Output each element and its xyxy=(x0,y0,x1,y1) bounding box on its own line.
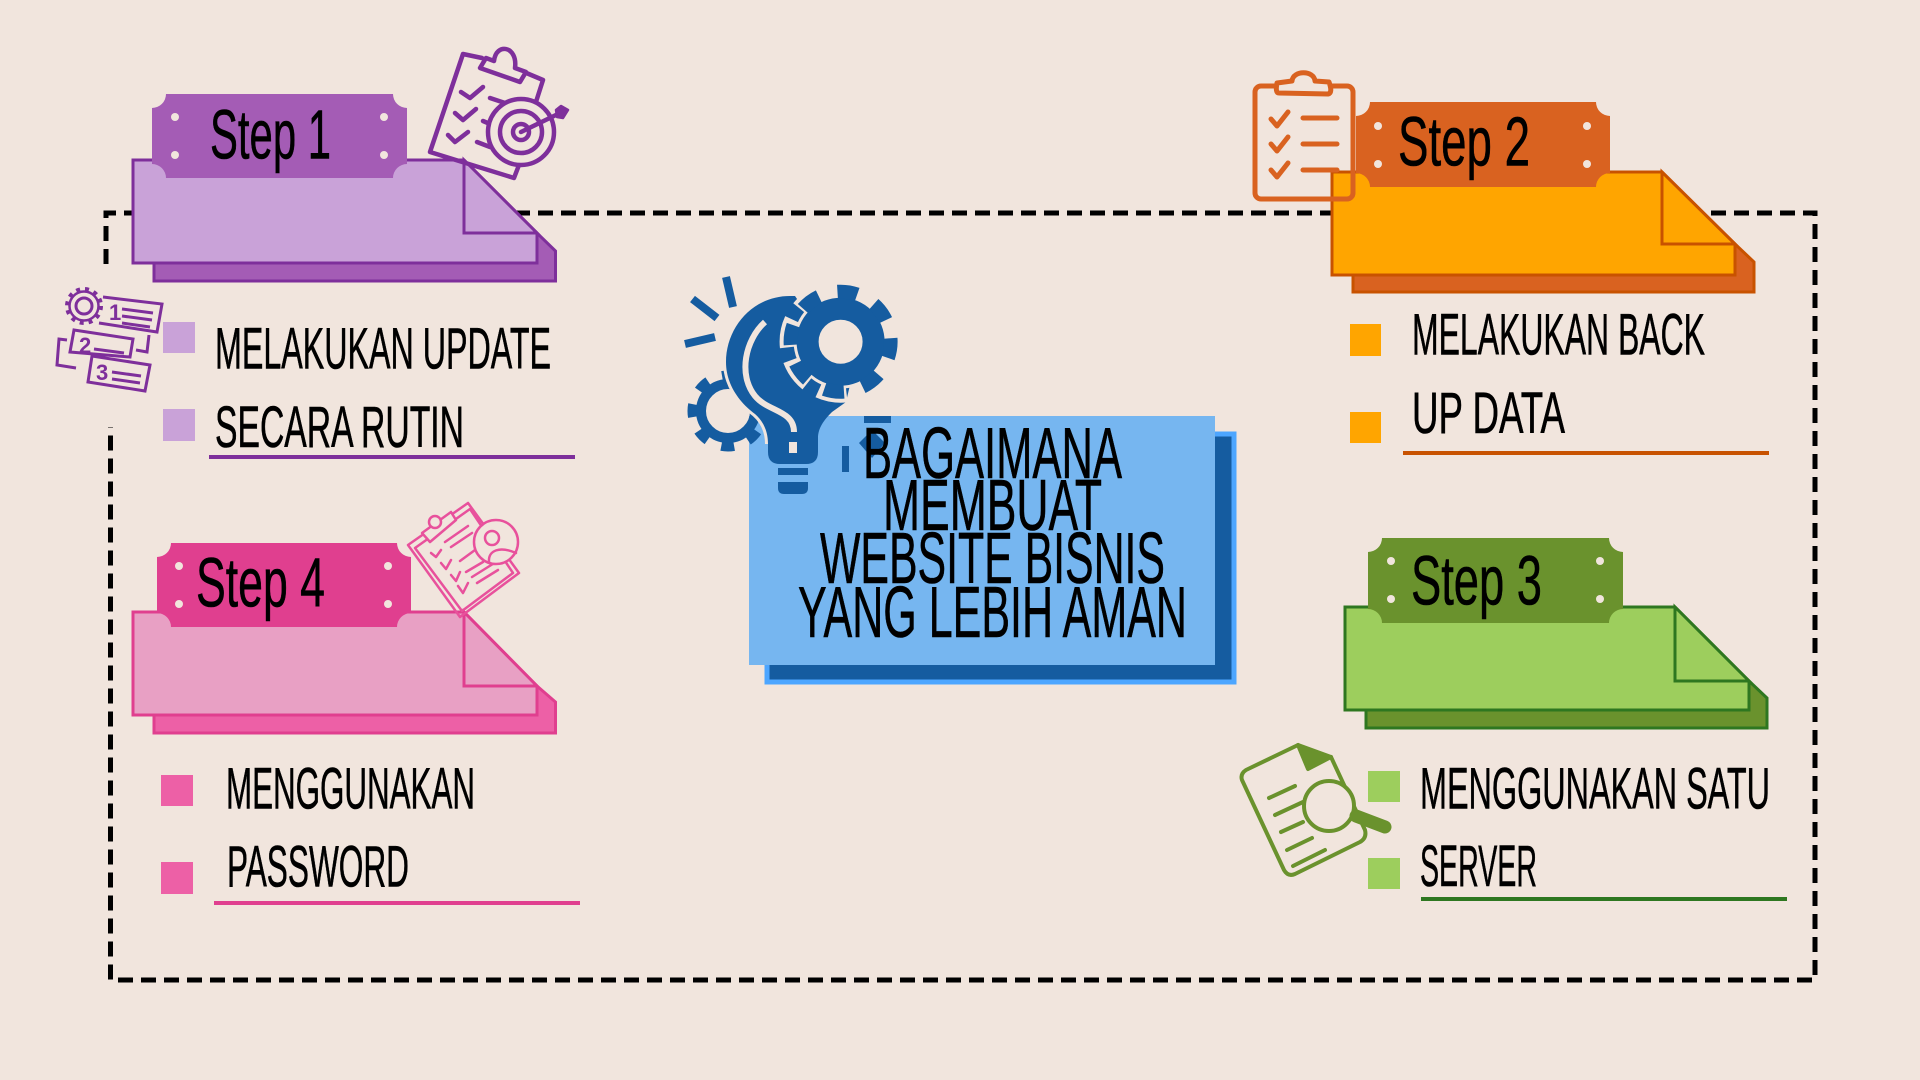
bullet squares step 4 xyxy=(161,775,193,894)
title: YANG LEBIH AMAN xyxy=(798,573,1187,653)
icon: clipboard with target xyxy=(430,49,568,178)
title card front xyxy=(749,416,1215,665)
step 4 underline xyxy=(214,901,580,905)
title: BAGAIMANA xyxy=(863,414,1122,494)
bullet squares step 3 xyxy=(1368,771,1400,889)
step 3 text: SERVER xyxy=(1420,834,1537,899)
icon: numbered process: 1 xyxy=(109,300,121,325)
step 2 text: UP DATA xyxy=(1412,381,1565,446)
dashed frame connecting the steps xyxy=(106,213,1815,980)
step 1 text: SECARA RUTIN xyxy=(215,395,464,460)
step 2 label: Step 2 xyxy=(1398,102,1530,180)
panel: step 1 xyxy=(57,49,575,460)
icon: numbered process xyxy=(57,289,162,391)
bullet squares step 2 xyxy=(1350,324,1381,443)
icon: numbered process: 2 xyxy=(79,333,91,358)
step 2 text xyxy=(1412,302,1705,446)
step 3 folded note xyxy=(1345,607,1767,728)
title: WEBSITE BISNIS xyxy=(820,519,1165,599)
icon: checklist clipboard xyxy=(1255,73,1353,199)
step 4 text: PASSWORD xyxy=(227,834,409,900)
step 3 text xyxy=(1420,756,1770,899)
icon: light bulb with gears xyxy=(685,277,899,494)
step 1 ticket tag xyxy=(152,94,407,178)
step 4 folded note xyxy=(133,612,556,733)
panel: step 2 xyxy=(1255,73,1769,455)
bullet squares step 1 xyxy=(163,322,195,441)
panel: step 3 xyxy=(1242,538,1787,901)
step 2 folded note xyxy=(1332,172,1754,292)
icon: clipboard with profile xyxy=(408,503,519,617)
step 1 folded note xyxy=(133,160,556,281)
step 4 label: Step 4 xyxy=(196,544,325,622)
step 3 underline xyxy=(1421,897,1787,901)
step 3 ticket tag xyxy=(1368,538,1623,623)
step 2 ticket tag xyxy=(1356,102,1610,187)
title card shadow xyxy=(767,434,1234,682)
icon: numbered process: 3 xyxy=(96,360,108,385)
step 1 label: Step 1 xyxy=(210,96,331,174)
step 4 ticket tag xyxy=(157,543,411,627)
panel: central title card xyxy=(685,277,1234,682)
title xyxy=(798,414,1187,653)
step 4 text xyxy=(226,756,475,900)
step 2 underline xyxy=(1403,451,1769,455)
icon: document with magnifier xyxy=(1242,745,1385,875)
title: MEMBUAT xyxy=(883,466,1102,546)
panel: step 4 xyxy=(133,503,580,905)
step 4 text: MENGGUNAKAN xyxy=(226,756,475,822)
step 3 label: Step 3 xyxy=(1411,542,1542,620)
step 1 text: MELAKUKAN UPDATE xyxy=(215,316,551,382)
step 1 underline xyxy=(209,455,575,459)
step 1 text xyxy=(215,316,551,460)
